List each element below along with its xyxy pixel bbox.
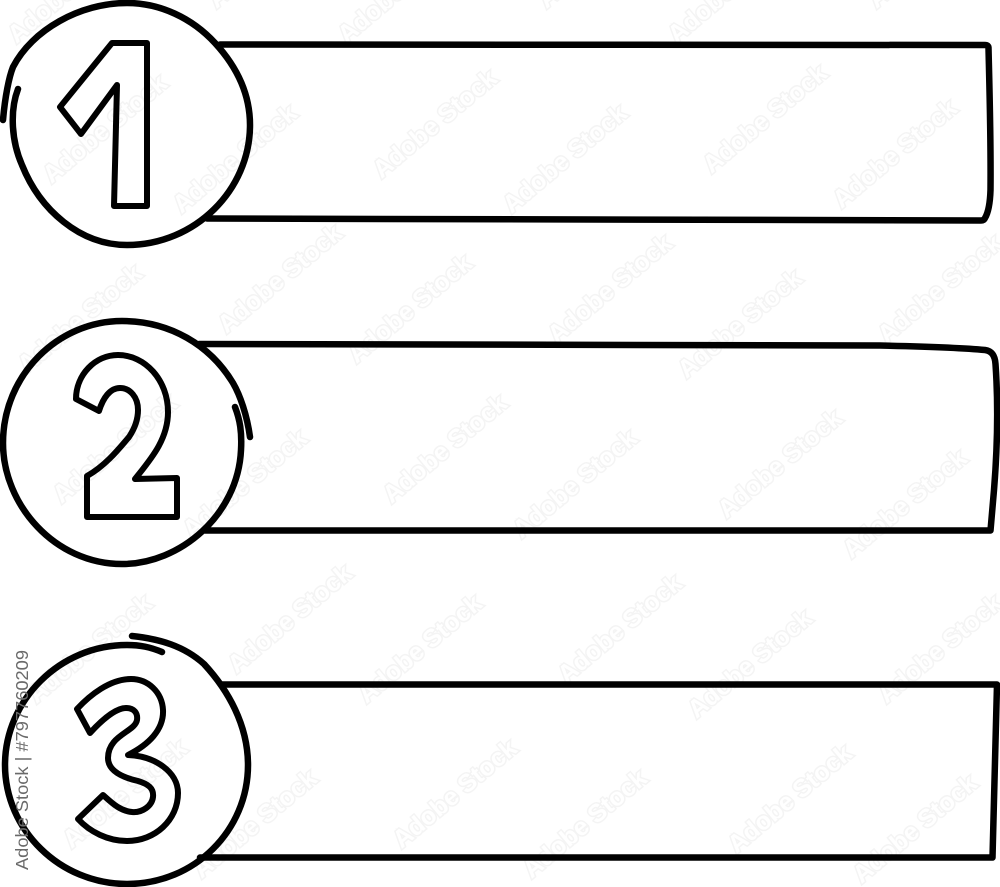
watermark pattern: Adobe Stock: [352, 589, 487, 709]
watermark pattern: Adobe Stock: [517, 764, 652, 884]
watermark pattern: Adobe Stock: [187, 764, 322, 884]
watermark pattern: Adobe Stock: [37, 69, 172, 189]
panel: banner 3: [5, 636, 997, 884]
watermark pattern: Adobe Stock: [377, 389, 512, 509]
watermark pattern: Adobe Stock: [177, 424, 312, 544]
watermark pattern: Adobe Stock: [212, 219, 347, 339]
panel: banner 1: [3, 3, 991, 245]
watermark pattern: Adobe Stock: [47, 389, 182, 509]
banner 3 outline: [200, 684, 997, 858]
watermark pattern: Adobe Stock: [827, 94, 962, 214]
watermark pattern: Adobe Stock: [712, 404, 847, 524]
digit 3: [77, 679, 178, 841]
watermark pattern: Adobe Stock: [542, 229, 677, 349]
watermark pattern: Adobe Stock: [222, 559, 357, 679]
banner 1 outline: [207, 44, 991, 220]
watermark pattern: Adobe Stock: [497, 99, 632, 219]
watermark pattern: Adobe Stock: [507, 424, 642, 544]
watermark pattern: Adobe Stock: [12, 259, 147, 379]
badge circle 3: [5, 636, 248, 884]
watermark pattern: Adobe Stock: [387, 734, 522, 854]
badge circle 1: [3, 3, 250, 245]
watermark pattern: Adobe Stock: [847, 769, 982, 887]
watermark pattern: Adobe Stock: [722, 739, 857, 859]
watermark pattern: Adobe Stock: [837, 444, 972, 564]
badge circle 2: [3, 321, 250, 564]
watermark pattern: Adobe Stock: [57, 734, 192, 854]
watermark pattern: Adobe Stock: [22, 589, 157, 709]
watermark pattern: Adobe Stock: [167, 99, 302, 219]
digit 1: [60, 43, 147, 206]
watermark pattern: Adobe Stock: [697, 59, 832, 179]
banner 2 outline: [199, 344, 997, 530]
watermark pattern: Adobe Stock: [367, 64, 502, 184]
watermark pattern: Adobe Stock: [552, 569, 687, 689]
stock id caption: Adobe Stock | #797760209: [12, 650, 32, 870]
digit 2: [76, 355, 177, 517]
panel: banner 2: [3, 321, 997, 564]
watermark pattern: Adobe Stock: [342, 249, 477, 369]
watermark pattern: Adobe Stock: [672, 264, 807, 384]
watermark pattern: Adobe Stock: [682, 604, 817, 724]
